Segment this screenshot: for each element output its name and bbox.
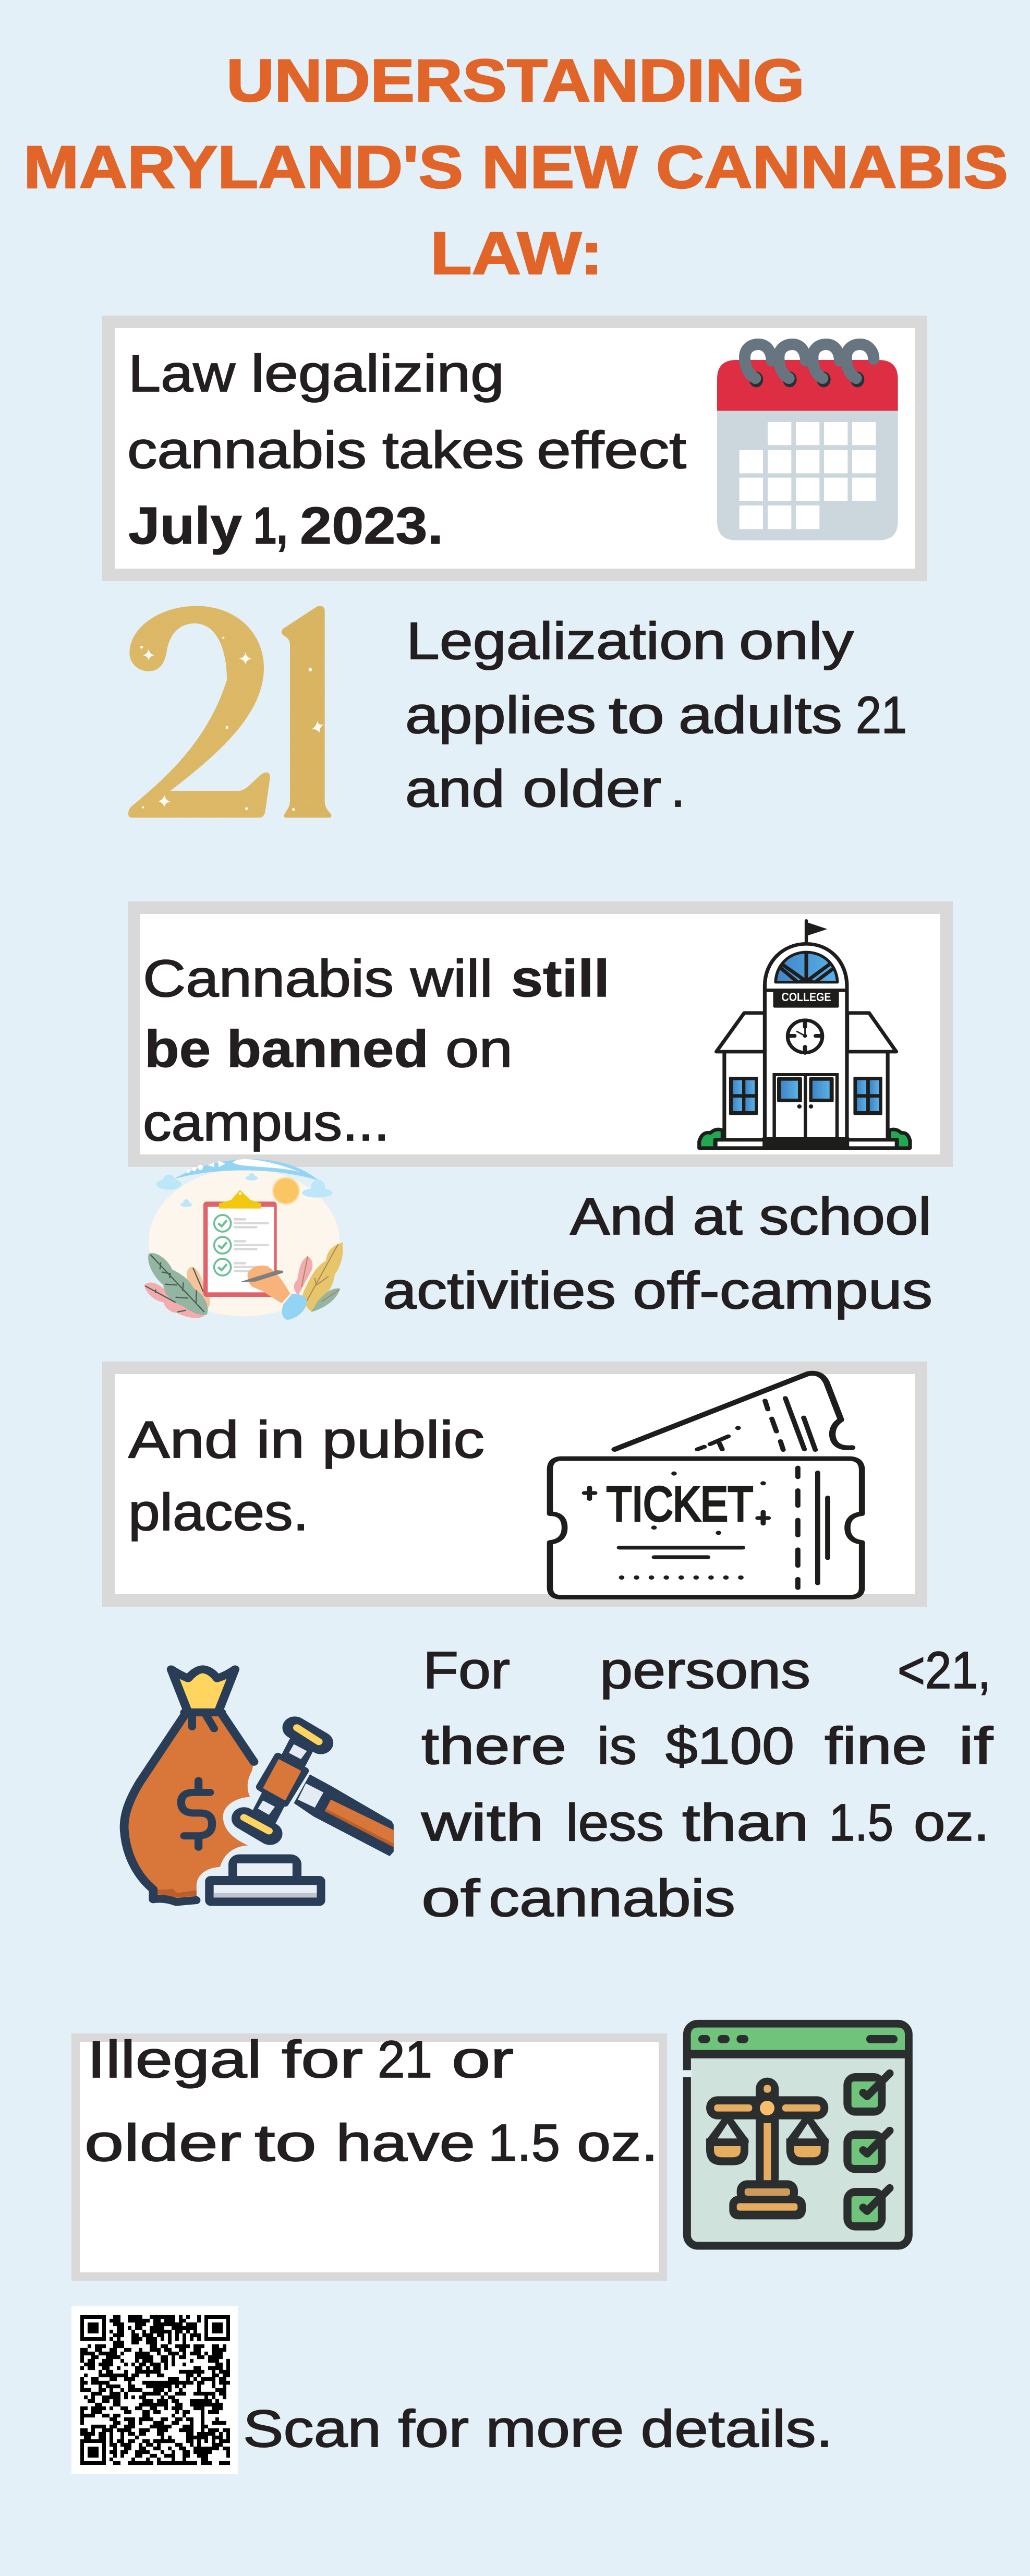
text: fine for persons under 21: if xyxy=(959,1717,993,1775)
icon: money bag and gavel xyxy=(124,1669,394,1906)
graphic: gold number 21 xyxy=(128,606,331,817)
text: adults 21 and older: . xyxy=(671,760,685,818)
title: MARYLAND'S NEW CANNABIS xyxy=(23,134,1008,201)
text: illegal for 21 or older: have xyxy=(336,2114,475,2172)
text: fine for persons under 21: fine xyxy=(825,1717,927,1775)
title: LAW: xyxy=(430,220,603,287)
text: in public places: And in public xyxy=(128,1411,484,1469)
text: law takes effect xyxy=(127,344,686,555)
text: fine for persons under 21: For xyxy=(423,1641,510,1700)
text: school activities off-campus: activities off-campus xyxy=(383,1261,932,1320)
text: illegal for 21 or older: 21 xyxy=(378,2030,432,2089)
text: fine for persons under 21: oz. xyxy=(914,1793,989,1852)
text: adults 21 and older: and xyxy=(405,760,505,818)
icon: calendar xyxy=(717,344,898,540)
text: fine for persons under 21: persons xyxy=(600,1641,810,1700)
text: in public places xyxy=(128,1411,484,1542)
panel: banned on campus xyxy=(134,908,947,1161)
text: still banned on campus xyxy=(143,949,610,1152)
text: adults 21 and older: 21 xyxy=(856,686,907,744)
QR code xyxy=(71,2306,238,2474)
text: illegal for 21 or older: for xyxy=(282,2030,363,2089)
panel: illegal amount xyxy=(76,2030,663,2277)
text: school activities off-campus xyxy=(383,1187,932,1320)
text: scan for more details: Scan for more details. xyxy=(243,2400,833,2458)
icon: college building xyxy=(699,921,910,1150)
title xyxy=(23,47,1008,287)
text: fine for persons under 21: 1.5 xyxy=(829,1793,893,1852)
text: still banned on campus: campus... xyxy=(143,1093,390,1152)
text: school activities off-campus: And at school xyxy=(570,1187,931,1246)
text: law takes effect: 1, xyxy=(253,497,288,555)
text: illegal for 21 or older: oz. xyxy=(577,2114,658,2172)
text: fine for persons under 21: of xyxy=(421,1869,480,1928)
text: fine for persons under 21: less xyxy=(566,1793,664,1852)
text: adults 21 and older: applies xyxy=(405,686,596,744)
text: adults 21 and older xyxy=(405,612,907,818)
text: law takes effect: July xyxy=(128,497,242,555)
text: law takes effect: takes xyxy=(382,421,524,479)
text: law takes effect: legalizing xyxy=(251,344,504,403)
icon: college building: COLLEGE xyxy=(781,990,831,1004)
text: illegal for 21 or older xyxy=(84,2030,658,2172)
panel: effective date xyxy=(108,322,921,575)
icon: clipboard checklist with hand xyxy=(144,1159,343,1320)
text: illegal for 21 or older: to xyxy=(255,2114,317,2172)
text: in public places: places. xyxy=(128,1483,309,1542)
text: law takes effect: cannabis xyxy=(127,421,367,479)
icon: tickets: TICKET xyxy=(607,1477,753,1531)
text: still banned on campus: on xyxy=(445,1020,513,1078)
text: adults 21 and older: only xyxy=(739,612,854,670)
text: fine for persons under 21 xyxy=(421,1641,993,1928)
icon: scales of justice in a browser window xyxy=(682,2024,908,2246)
text: fine for persons under 21: with xyxy=(421,1793,544,1852)
text: adults 21 and older: adults xyxy=(678,686,842,744)
text: fine for persons under 21: cannabis xyxy=(489,1869,735,1928)
text: law takes effect: Law xyxy=(128,344,236,403)
text: fine for persons under 21: <21, xyxy=(898,1641,991,1700)
text: fine for persons under 21: than xyxy=(682,1793,809,1852)
title: UNDERSTANDING xyxy=(226,47,805,114)
text: fine for persons under 21: is xyxy=(597,1717,637,1775)
panel: public places xyxy=(108,1368,921,1600)
text: adults 21 and older: Legalization xyxy=(406,612,726,670)
text: illegal for 21 or older: 1.5 xyxy=(488,2114,560,2172)
text: illegal for 21 or older: Illegal xyxy=(87,2030,262,2089)
text: still banned on campus: be banned xyxy=(144,1020,429,1078)
text: law takes effect: effect xyxy=(537,421,686,479)
text: still banned on campus: Cannabis will xyxy=(143,949,493,1008)
text: adults 21 and older: to xyxy=(609,686,664,744)
text: law takes effect: 2023. xyxy=(300,497,443,555)
icon: tickets xyxy=(550,1373,862,1597)
text: illegal for 21 or older: or xyxy=(452,2030,514,2089)
text: fine for persons under 21: $100 xyxy=(665,1717,794,1775)
text: illegal for 21 or older: older xyxy=(84,2114,241,2172)
text: adults 21 and older: older xyxy=(523,760,661,818)
text: fine for persons under 21: there xyxy=(421,1717,566,1775)
text: still banned on campus: still xyxy=(511,949,610,1008)
